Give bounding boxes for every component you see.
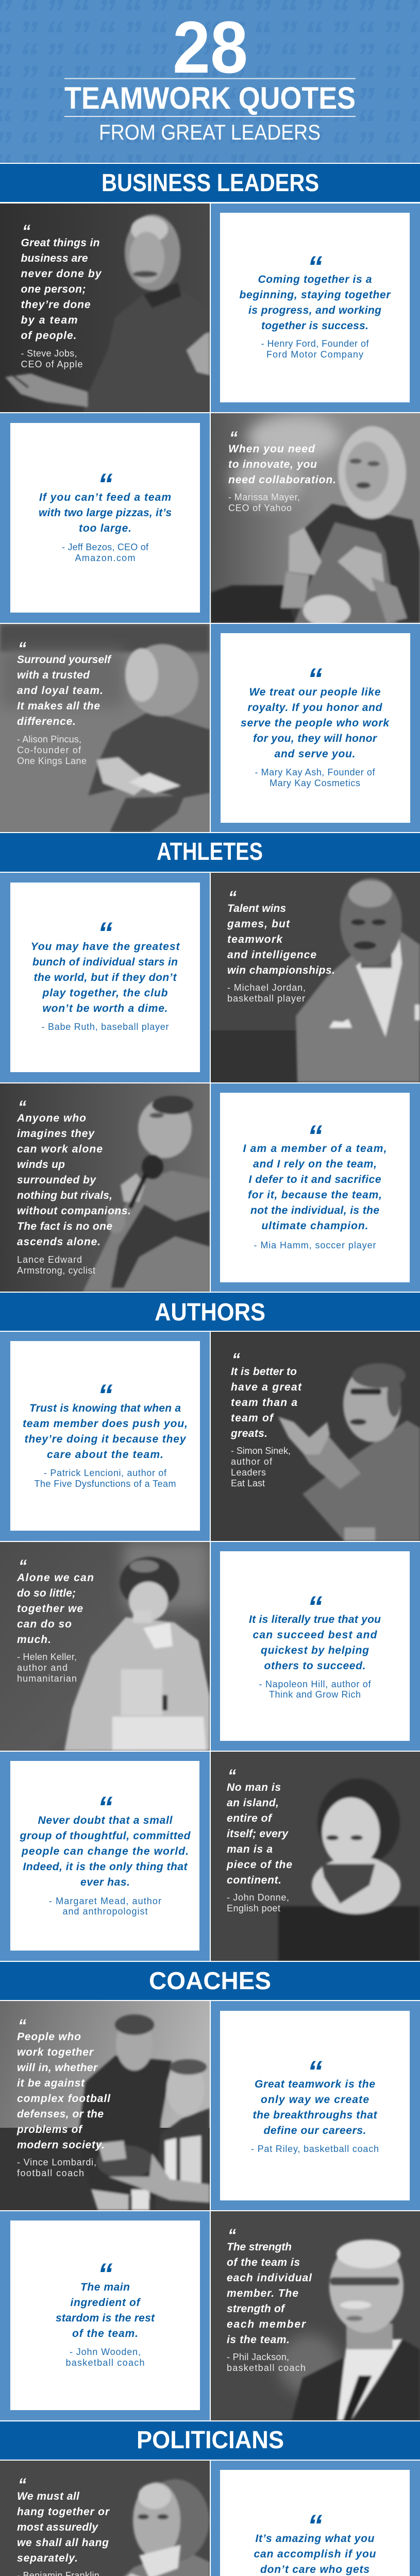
attribution: - Michael Jordan, [227, 982, 306, 993]
quote mark: “ [18, 2475, 26, 2494]
section heading: business leaders [0, 164, 420, 202]
attribution: The Five Dysfunctions of a Team [34, 1479, 176, 1489]
photo panel: Steve Jobs [0, 204, 210, 412]
quote text: the world, but if they don’t [34, 972, 177, 984]
quote text: Never doubt that a small [38, 1815, 173, 1826]
attribution [227, 2352, 306, 2373]
quote text: and I rely on the team, [253, 1158, 377, 1170]
attribution: - Marissa Mayer, [228, 492, 300, 502]
quote text: and loyal team. [17, 685, 103, 697]
quote text: greats. [230, 1428, 267, 1439]
quote text: will in, whether [17, 2062, 98, 2074]
section heading: politicians [0, 2421, 420, 2460]
quote mark: “ [307, 2055, 323, 2089]
quote text: each member [227, 2318, 307, 2330]
quote text: not the individual, is the [250, 1205, 379, 1216]
photo panel: Helen Keller [0, 1542, 210, 1751]
quote text: The strength [227, 2241, 292, 2253]
quote card: Mia Hamm [211, 1083, 420, 1292]
attribution: - Margaret Mead, author [49, 1896, 161, 1906]
quote text: People who [17, 2031, 81, 2043]
quote text: team of [231, 1412, 274, 1424]
attribution: - Jeff Bezos, CEO of [62, 542, 149, 552]
quote text: teamwork [227, 934, 283, 945]
quote text: they’re done [21, 299, 91, 311]
quote text: of the team. [72, 2328, 138, 2340]
quote text [239, 274, 391, 332]
attribution: Amazon.com [75, 553, 135, 563]
quote mark: “ [98, 917, 112, 950]
quote text [31, 941, 180, 1014]
quote text: team than a [231, 1397, 297, 1409]
section heading: authors [0, 1293, 420, 1331]
quote text: of the team is [227, 2257, 300, 2268]
quote text: won’t be worth a dime. [42, 1003, 168, 1014]
quote text: have a great [231, 1381, 302, 1393]
quote text [17, 654, 112, 727]
quote text: the breakthroughs that [253, 2109, 377, 2121]
quote text [39, 492, 172, 534]
attribution: - John Donne, [227, 1892, 289, 1903]
attribution [259, 1679, 371, 1700]
quote text [241, 686, 390, 760]
attribution [18, 1653, 76, 1682]
quote mark: “ [19, 1556, 27, 1575]
quote text [253, 2078, 377, 2137]
quote mark: “ [307, 1590, 323, 1624]
quote text: Great things in [21, 237, 100, 249]
quote text: If you can’t feed a team [39, 492, 171, 503]
quote text: Indeed, it is the only thing that [23, 1861, 188, 1873]
quote text: continent. [227, 1874, 281, 1886]
quote mark: “ [307, 663, 323, 696]
attribution: Leaders [231, 1467, 266, 1478]
quote mark: “ [307, 250, 323, 284]
quote mark: “ [18, 2016, 26, 2035]
quote text: modern society. [17, 2139, 105, 2151]
quote mark: “ [98, 468, 112, 501]
quote text: an island, [227, 1797, 279, 1809]
section heading: athletes: ATHLETES [157, 838, 263, 866]
attribution [231, 1446, 291, 1488]
attribution [227, 1892, 289, 1913]
quote text: most assuredly [17, 2521, 98, 2533]
quote text: Coming together is a [258, 274, 372, 285]
quote text: problems of [16, 2124, 83, 2136]
quote text: too large. [79, 522, 131, 534]
quote text: we shall all hang [17, 2537, 109, 2549]
quote text: serve the people who work [241, 717, 390, 729]
attribution: - Alison Pincus, [17, 734, 81, 744]
attribution: - Phil Jackson, [227, 2352, 289, 2362]
quote mark: “ [228, 1766, 236, 1785]
attribution [17, 734, 87, 766]
quote text: We treat our people like [249, 686, 381, 698]
quote text [16, 2031, 111, 2151]
quote text: can do so [17, 1618, 72, 1630]
quote mark: “ [18, 639, 26, 657]
quote text: defenses, or the [17, 2108, 104, 2120]
quote card: Pat Riley [211, 2001, 420, 2210]
quote card: Harry S. Truman [211, 2461, 420, 2576]
attribution: - Simon Sinek, [231, 1446, 291, 1456]
attribution: Lance Edward [17, 1255, 82, 1265]
quote text: man is a [227, 1843, 273, 1855]
attribution [34, 1468, 176, 1489]
quote text: one person; [21, 283, 86, 295]
quote text: The main [80, 2281, 130, 2293]
quote mark: “ [307, 2509, 323, 2543]
quote text [227, 903, 335, 976]
attribution: football coach [17, 2168, 84, 2178]
quote text: ever has. [80, 1876, 130, 1888]
section heading: athletes [0, 833, 420, 872]
quote mark: “ [228, 2226, 236, 2244]
quote text: group of thoughtful, committed [20, 1830, 191, 1842]
quote text: beginning, staying together [239, 289, 391, 301]
quote text [230, 1366, 302, 1439]
quote mark: “ [232, 1350, 240, 1368]
quote text: never done by [21, 268, 102, 280]
quote text: business are [21, 252, 88, 264]
quote text: play together, the club [42, 987, 168, 999]
quote text [17, 2490, 110, 2564]
quote text: and serve you. [274, 748, 356, 760]
quote text: of people. [21, 330, 76, 342]
attribution: - Mary Kay Ash, Founder of [255, 767, 375, 777]
attribution: author of [231, 1456, 273, 1467]
quote text: is progress, and working [248, 304, 381, 316]
attribution [229, 494, 299, 511]
quote text: strength of [227, 2303, 285, 2315]
quote text [23, 1402, 188, 1461]
quote text: quickest by helping [261, 1645, 369, 1656]
quote mark: “ [98, 2258, 112, 2291]
quote text: It makes all the [17, 700, 100, 712]
quote card: Babe Ruth [0, 873, 210, 1082]
quote text: winds up [17, 1159, 65, 1171]
attribution: Ford Motor Company [266, 349, 363, 360]
quote text: nothing but rivals, [17, 1190, 112, 1201]
attribution: CEO of Yahoo [228, 503, 292, 513]
photo panel: Benjamin Franklin [0, 2461, 210, 2576]
attribution: - Napoleon Hill, author of [259, 1679, 371, 1689]
quote text: and intelligence [227, 949, 316, 961]
attribution [21, 348, 82, 369]
quote text: royalty. If you honor and [247, 702, 383, 714]
quote text: define our careers. [264, 2125, 366, 2137]
attribution [66, 2347, 144, 2368]
subtitle: FROM GREAT LEADERS [99, 120, 321, 144]
quote text: care about the team. [47, 1449, 163, 1461]
quote text: by a team [21, 314, 77, 326]
quote text: It is literally true that you [249, 1614, 381, 1625]
quote mark: “ [98, 1379, 112, 1412]
quote text: together is success. [261, 320, 368, 332]
attribution: author and [17, 1663, 68, 1673]
photo panel: Simon Sinek [211, 1332, 420, 1541]
quote text: You may have the greatest [31, 941, 180, 953]
quote text: each individual [227, 2272, 312, 2284]
attribution: English poet [227, 1903, 280, 1913]
quote card: Napoleon Hill [211, 1542, 420, 1751]
quote text: bunch of individual stars in [32, 956, 178, 968]
quote text: member. The [227, 2287, 298, 2299]
attribution: basketball coach [66, 2358, 144, 2368]
quote text: for you, they will honor [253, 733, 378, 744]
quote text: complex football [17, 2093, 111, 2105]
attribution [227, 982, 306, 1004]
attribution: - Patrick Lencioni, author of [44, 1468, 167, 1478]
attribution [49, 1896, 161, 1917]
quote text: The fact is no one [17, 1221, 112, 1232]
attribution: - Vince Lombardi, [17, 2157, 96, 2167]
quote text: We must all [17, 2490, 80, 2502]
quote text [16, 1572, 94, 1646]
quote text [16, 1112, 131, 1248]
quote text: imagines they [17, 1128, 95, 1140]
quote text: difference. [17, 716, 76, 727]
attribution: Mary Kay Cosmetics [270, 778, 360, 788]
quote text: is the team. [227, 2334, 290, 2346]
hero header [0, 0, 420, 163]
section heading: politicians: POLITICIANS [137, 2427, 284, 2454]
quote card: Henry Ford [211, 204, 420, 412]
quote text: ultimate champion. [262, 1220, 368, 1232]
attribution: Eat Last [231, 1478, 265, 1488]
quote text: entire of [227, 1812, 273, 1824]
quote text [226, 1782, 292, 1886]
photo panel: John Donne [211, 1752, 420, 1961]
quote text: to innovate, you [228, 459, 317, 470]
attribution: - John Wooden, [70, 2347, 141, 2357]
attribution: and anthropologist [63, 1906, 147, 1917]
quote text: Anyone who [16, 1112, 86, 1124]
quote text: people can change the world. [21, 1845, 189, 1857]
attribution: - Pat Riley, basketball coach [251, 2144, 379, 2154]
quote mark: “ [18, 1097, 26, 1116]
attribution: - Babe Ruth, baseball player [41, 1022, 169, 1032]
quote mark: “ [229, 428, 238, 447]
quote text: I am a member of a team, [243, 1143, 387, 1155]
section heading: coaches [0, 1962, 420, 2000]
quote text: No man is [227, 1782, 281, 1793]
attribution: One Kings Lane [17, 756, 87, 766]
attribution [261, 338, 369, 360]
quote text: win championships. [227, 964, 335, 976]
photo panel: Vince Lombardi [0, 2001, 210, 2210]
quote text: ingredient of [70, 2297, 141, 2309]
attribution: basketball player [227, 993, 305, 1004]
quote card: Jeff Bezos [0, 413, 210, 623]
quote text [254, 2533, 376, 2576]
quote text [249, 1614, 381, 1672]
photo panel: Phil Jackson [211, 2211, 420, 2420]
attribution: basketball coach [227, 2363, 306, 2373]
quote text: do so little; [17, 1587, 76, 1599]
quote text: only way we create [261, 2094, 369, 2106]
quote text: stardom is the rest [56, 2312, 155, 2324]
quote text [20, 1815, 191, 1888]
quote mark: “ [228, 888, 237, 906]
quote mark: “ [307, 1120, 323, 1153]
quote text: piece of the [226, 1859, 292, 1871]
quote text: ascends alone. [17, 1236, 100, 1248]
quote text: they’re doing it because they [25, 1433, 187, 1445]
attribution: - Henry Ford, Founder of [261, 338, 369, 349]
attribution: Co-founder of [17, 745, 81, 755]
attribution: Armstrong, cyclist [17, 1265, 95, 1276]
attribution: humanitarian [17, 1673, 77, 1684]
attribution: Think and Grow Rich [269, 1689, 361, 1700]
quote text [56, 2281, 155, 2340]
quote card: Patrick Lencioni [0, 1332, 210, 1541]
quote text: It’s amazing what you [256, 2533, 375, 2545]
quote text: with two large pizzas, it’s [39, 507, 172, 519]
title number 28: 28 [173, 7, 248, 89]
quote text [21, 237, 102, 342]
quote text: games, but [227, 918, 290, 930]
quote text: It is better to [231, 1366, 297, 1378]
attribution: CEO of Apple [21, 359, 82, 369]
title: teamwork quotes: TEAMWORK QUOTES [64, 81, 356, 115]
quote text: with a trusted [17, 669, 90, 681]
quote card: John Wooden [0, 2211, 210, 2420]
quote text [227, 2241, 312, 2346]
section heading: coaches: COACHES [149, 1968, 271, 1995]
quote card: Margaret Mead [0, 1752, 210, 1961]
quote text: I defer to it and sacrifice [248, 1174, 381, 1185]
quote text: can succeed best and [253, 1629, 378, 1641]
attribution [255, 767, 375, 788]
quote text: team member does push you, [23, 1418, 188, 1430]
quote text: itself; every [227, 1828, 289, 1840]
attribution [17, 2159, 96, 2176]
attribution: - Helen Keller, [17, 1652, 77, 1662]
quote text [228, 443, 336, 486]
quote text: separately. [17, 2552, 78, 2564]
section heading: business leaders: BUSINESS LEADERS [102, 170, 319, 197]
quote text: hang together or [17, 2506, 110, 2518]
quote text: Alone we can [16, 1572, 94, 1584]
quote text: others to succeed. [264, 1660, 366, 1672]
quote text: Surround yourself [17, 654, 112, 666]
photo panel: Michael Jordan [211, 873, 420, 1082]
attribution [62, 542, 149, 563]
quote text: work together [17, 2046, 94, 2058]
section heading: authors: AUTHORS [155, 1299, 265, 1326]
quote text: can work alone [17, 1143, 103, 1155]
quote text: don’t care who gets [260, 2564, 369, 2575]
attribution [17, 1255, 95, 1276]
quote text: for it, because the team, [248, 1189, 382, 1201]
quote text: surrounded by [17, 1174, 96, 1186]
quote text: need collaboration. [228, 474, 336, 486]
quote text: When you need [228, 443, 315, 455]
quote text [243, 1143, 387, 1232]
photo panel: Lance Armstrong [0, 1083, 210, 1292]
photo panel: Alison Pincus [0, 624, 210, 832]
photo panel: Marissa Mayer [211, 413, 420, 626]
quote mark: “ [98, 1791, 112, 1824]
quote text: without companions. [17, 1205, 131, 1217]
quote text: can accomplish if you [254, 2548, 376, 2560]
quote text: much. [17, 1634, 51, 1646]
quote mark: “ [22, 222, 30, 240]
quote text: Trust is knowing that when a [29, 1402, 181, 1414]
quote text: together we [17, 1603, 83, 1615]
quote text: Talent wins [227, 903, 286, 914]
quote text: Great teamwork is the [255, 2078, 375, 2090]
attribution: - Mia Hamm, soccer player [254, 1240, 376, 1250]
quote card: Mary Kay Ash [211, 624, 420, 832]
attribution: - Steve Jobs, [21, 348, 77, 359]
quote text: it be against [17, 2077, 85, 2089]
